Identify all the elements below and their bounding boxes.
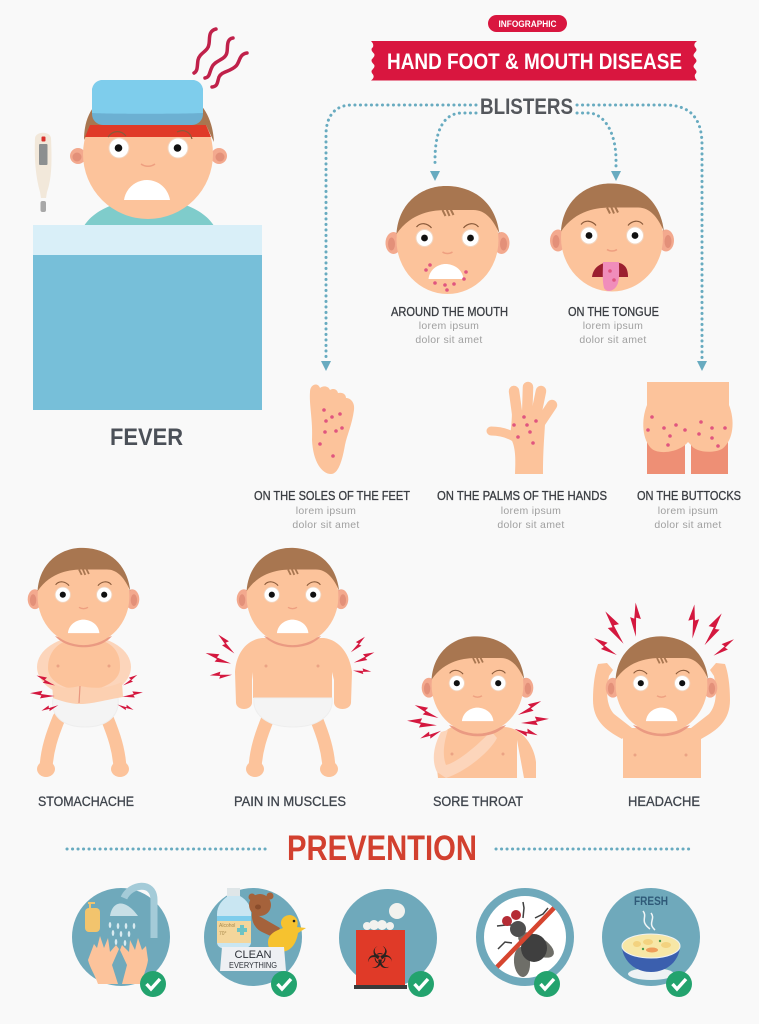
legs <box>255 718 329 768</box>
shower head <box>110 904 138 916</box>
icon: fresh soup: FRESH <box>634 894 668 908</box>
panel: headache <box>591 602 737 809</box>
label <box>391 305 508 346</box>
bottle <box>217 888 251 949</box>
arrow: to buttocks <box>577 105 707 371</box>
torso <box>623 728 701 778</box>
label: ON THE BUTTOCKS <box>637 489 741 503</box>
biohazard symbol: ☣ <box>367 941 393 976</box>
nipples <box>264 664 320 668</box>
nipples <box>450 752 504 756</box>
check <box>271 971 297 997</box>
forearms and hands <box>52 682 123 704</box>
heading: blisters: BLISTERS <box>480 94 573 119</box>
label: ON THE SOLES OF THE FEET <box>254 489 410 503</box>
shoulders <box>84 204 214 226</box>
label: dolor sit amet <box>292 519 360 531</box>
teddy bear <box>248 892 280 938</box>
check <box>140 971 166 997</box>
panel: soles of the feet <box>254 385 410 531</box>
mouth <box>124 180 170 200</box>
fly <box>497 902 558 978</box>
label: STOMACHACHE <box>38 794 134 809</box>
soup ingredients <box>633 939 671 952</box>
label: dolor sit amet <box>415 334 483 346</box>
neck shadow <box>633 725 690 736</box>
waste puffs <box>363 903 405 930</box>
label: PAIN IN MUSCLES <box>234 794 346 809</box>
ice pack <box>92 80 203 125</box>
icon: no flies <box>480 892 570 997</box>
label: lorem ipsum <box>658 505 718 517</box>
face <box>83 89 213 219</box>
panel: fever <box>33 29 262 410</box>
neck shadow <box>264 636 321 647</box>
soap bottle <box>85 903 100 932</box>
plate <box>628 968 674 980</box>
label <box>637 489 741 531</box>
label <box>254 489 410 531</box>
neck shadow <box>55 636 112 647</box>
sign: CLEAN <box>234 949 272 961</box>
torso <box>48 638 120 690</box>
label: dolor sit amet <box>497 519 565 531</box>
bowl <box>622 947 680 972</box>
diaper <box>254 698 332 727</box>
label: fever: FEVER <box>110 424 183 451</box>
pain bolts <box>407 699 549 743</box>
sign <box>220 947 286 971</box>
label: ON THE TONGUE <box>568 305 659 319</box>
duck <box>268 915 306 952</box>
panel: sore throat <box>407 636 549 809</box>
label: HEADACHE <box>628 794 700 809</box>
label: SORE THROAT <box>433 794 523 809</box>
label: dolor sit amet <box>579 334 647 346</box>
steam <box>643 911 655 930</box>
check <box>534 971 560 997</box>
panel: palms of the hands <box>437 387 607 531</box>
panel: buttocks <box>637 382 741 531</box>
legs <box>46 718 120 768</box>
icon: hand <box>491 387 552 474</box>
label: lorem ipsum <box>501 505 561 517</box>
mouth with tongue <box>592 262 628 291</box>
sign: EVERYTHING <box>229 960 277 970</box>
label: AROUND THE MOUTH <box>391 305 508 319</box>
label: lorem ipsum <box>296 505 356 517</box>
check <box>666 971 692 997</box>
arrow: to around the mouth <box>430 113 476 181</box>
raised arm <box>434 730 497 778</box>
label <box>437 489 607 531</box>
title banner: HAND FOOT & MOUTH DISEASE <box>387 49 682 74</box>
water drops <box>109 922 135 946</box>
feet <box>37 761 129 777</box>
check <box>408 971 434 997</box>
arms wrapped around torso <box>37 636 131 698</box>
icon: foot <box>310 385 354 474</box>
tap <box>124 886 154 938</box>
hands <box>88 936 148 984</box>
label: lorem ipsum <box>419 320 479 332</box>
label: dolor sit amet <box>654 519 722 531</box>
diaper <box>53 698 118 727</box>
heading: prevention: PREVENTION <box>287 829 477 868</box>
pain bolts <box>30 673 143 714</box>
torso and right arm <box>436 727 536 778</box>
bed <box>33 225 262 410</box>
icon: buttocks <box>643 382 733 474</box>
label: lorem ipsum <box>583 320 643 332</box>
torso and arms <box>235 638 352 709</box>
raised arms <box>593 663 730 739</box>
icon: heat waves <box>194 29 247 87</box>
bin <box>356 930 405 985</box>
icon: washing hands <box>72 886 170 997</box>
icon: fresh soup <box>602 888 700 997</box>
neck shadow <box>449 725 506 736</box>
ears <box>70 148 227 164</box>
panel: stomachache <box>28 548 143 809</box>
prohibition slash <box>497 908 554 967</box>
panel: on the tongue <box>550 184 674 346</box>
icon: clean everything <box>204 888 306 997</box>
nipples <box>56 664 110 668</box>
hair <box>84 104 214 142</box>
nipples <box>634 754 688 756</box>
eyes <box>108 131 192 166</box>
title banner <box>371 41 697 80</box>
panel: pain in muscles <box>204 548 376 809</box>
label: ON THE PALMS OF THE HANDS <box>437 489 607 503</box>
bottle: 70° <box>219 931 227 937</box>
pain bolts <box>204 633 376 680</box>
panel: around the mouth <box>386 186 510 346</box>
arrow: to on the tongue <box>577 113 621 181</box>
blisters <box>424 263 468 292</box>
icon: thermometer <box>35 133 52 212</box>
headband <box>85 125 211 137</box>
arrow: to soles of the feet <box>321 105 476 371</box>
badge: infographic: INFOGRAPHIC <box>498 19 557 29</box>
bottle: Alcohol <box>219 923 235 929</box>
feet <box>246 761 338 777</box>
pain bolts <box>591 602 737 658</box>
label <box>568 305 659 346</box>
icon: biohazard bin <box>339 889 437 997</box>
badge: infographic <box>488 15 567 32</box>
